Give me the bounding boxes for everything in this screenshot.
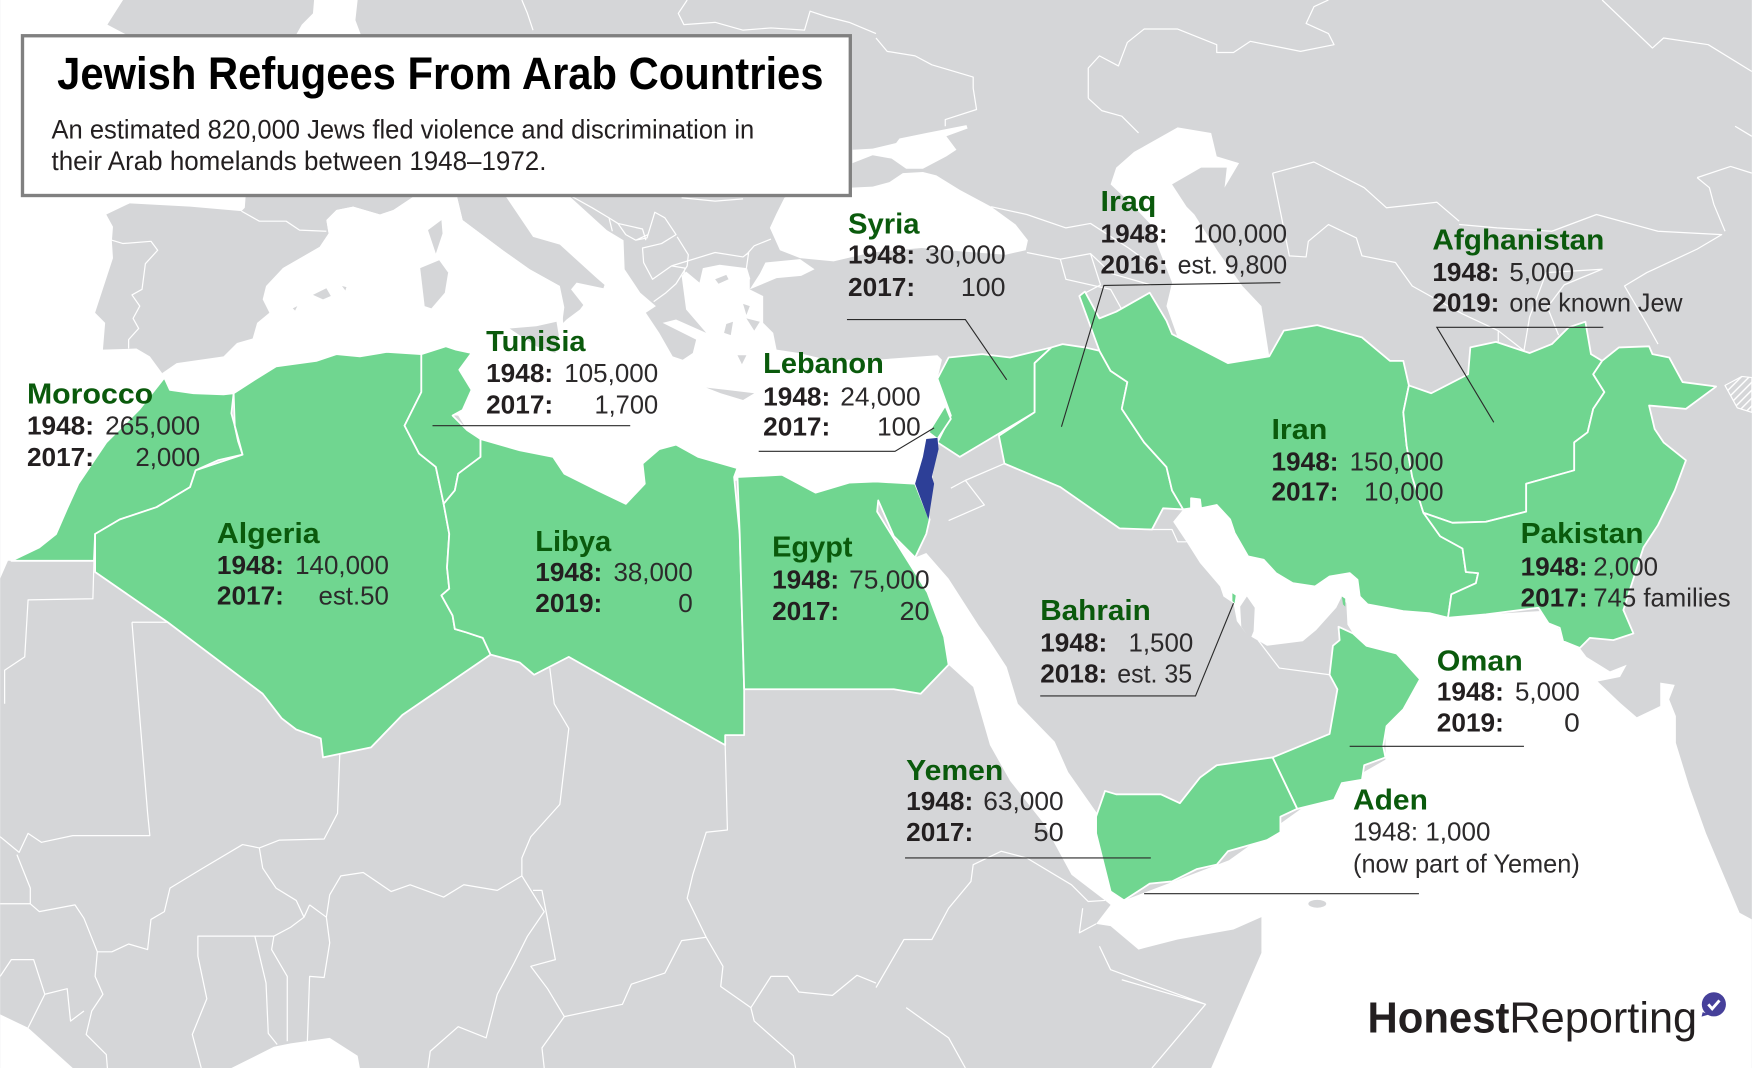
label: Lebanon: 1948: [763,382,830,412]
sea: Persian Gulf [1173,498,1368,646]
label: Afghanistan: Afghanistan [1432,225,1604,257]
label: Afghanistan: 5,000 [1509,257,1574,287]
label: Iran: 150,000 [1350,446,1444,476]
label: Morocco: 2017: [27,442,94,472]
label: Bahrain: Bahrain [1040,595,1151,627]
label: Lebanon: 24,000 [840,382,921,412]
label: Tunisia: 105,000 [564,358,658,388]
island: Crete [706,388,754,400]
label: Iran: 10,000 [1364,476,1444,506]
label: Algeria: Algeria [217,518,321,550]
sea: Caspian [1111,127,1269,363]
label: Pakistan [1521,518,1731,613]
title panel [22,36,850,196]
label: Syria: Syria [848,208,921,240]
label: Bahrain [1040,595,1193,689]
logo: HonestReporting: Honest [1368,994,1509,1042]
label: Algeria: 2017: [217,580,284,610]
logo: HonestReporting: Reporting [1509,994,1697,1042]
label: Tunisia [486,326,658,419]
country: Afghanistan [1403,322,1604,523]
island: Balearics [293,286,346,311]
label: Lebanon: 2017: [763,412,830,442]
sea: Red Sea and Indian Ocean [878,500,1752,1068]
label: Libya: Libya [535,526,612,558]
label: Pakistan: 1948: [1521,551,1588,581]
label: Egypt: 1948: [772,565,839,595]
sea: Mediterranean [162,192,951,508]
island: Corsica [428,220,443,254]
label: Pakistan: 2,000 [1593,551,1658,581]
logo: HonestReporting [1368,992,1726,1042]
country: Lebanon [929,406,951,439]
label: Egypt: Egypt [772,531,853,563]
country: Israel [915,438,939,519]
label: Bahrain: 2018: [1040,659,1107,689]
label: Iran [1271,414,1444,506]
country: Iran [1079,292,1478,618]
label: Tunisia: Tunisia [486,326,587,358]
sea: western Mediterranean basin [268,192,564,369]
sea: Gulf of Guinea [0,1014,360,1068]
label: Libya: 38,000 [613,557,693,587]
label: Afghanistan [1432,225,1684,318]
label: Iran: Iran [1271,414,1327,446]
label: Libya: 2019: [535,588,602,618]
label: Iran: 2017: [1271,476,1339,506]
heading: Jewish Refugees From Arab Countries [57,48,823,99]
island: Socotra [1308,900,1326,908]
country: Bahrain [1232,593,1236,603]
label: Iran: 1948: [1271,446,1339,476]
label: Tunisia: 1,700 [594,389,658,419]
country: Oman Musandam exclave [1342,597,1345,607]
label: Aden [1353,784,1580,878]
label: Syria: 30,000 [925,240,1006,270]
intro text: An estimated 820,000 Jews fled violence and discrimination in [52,115,754,145]
country: Algeria [95,352,491,757]
label: Algeria: est.50 [319,580,389,610]
label: Egypt [772,531,930,626]
label: Yemen: 50 [1034,817,1064,847]
label: Afghanistan: 1948: [1432,257,1499,287]
label: Egypt: 75,000 [849,565,930,595]
label: Yemen: 1948: [906,786,973,816]
label: Morocco: 1948: [27,411,94,441]
country: Morocco [11,378,243,561]
label: Morocco: 2,000 [135,442,200,472]
label: Morocco [27,378,200,472]
leader lines [432,283,1603,894]
label: Iraq: est. 9,800 [1178,250,1287,280]
label: Yemen: 2017: [906,817,973,847]
country: Libya [441,439,744,745]
label: Yemen: 63,000 [983,786,1064,816]
country: Pakistan [1423,346,1716,648]
label: Iraq: 1948: [1101,218,1168,248]
country: Tunisia [405,346,481,504]
label: Algeria [217,518,389,610]
island: Sicily [510,322,559,353]
sea: Azov [853,125,968,169]
label: Bahrain: 1,500 [1128,627,1193,657]
label: Afghanistan: one known Jew [1509,288,1684,318]
label: Tunisia: 2017: [486,389,553,419]
label: Libya: 1948: [535,557,602,587]
country: Egypt [737,475,949,694]
label: Bahrain: est. 35 [1117,659,1192,689]
label: Aden: 1948: 1,000 [1353,817,1490,847]
label: Lebanon: Lebanon [763,348,884,380]
label: Bahrain: 1948: [1040,627,1107,657]
label: Tunisia: 1948: [486,358,553,388]
country: Iraq [999,344,1183,530]
label: Lebanon: 100 [877,412,921,442]
intro text [52,115,754,176]
label: Oman: 2019: [1437,708,1504,738]
label: Iraq: 2016: [1101,250,1168,280]
label: Syria: 100 [961,272,1006,302]
island: Sardinia [420,260,448,308]
label: Syria [848,208,1006,302]
label: Algeria: 1948: [217,550,284,580]
sea: Black Sea [770,172,1028,261]
label: Morocco: Morocco [27,378,153,410]
label: Oman: 1948: [1437,676,1504,706]
label: Libya [535,526,693,618]
country: Kashmir disputed area [1725,376,1752,412]
label: Algeria: 140,000 [295,550,389,580]
label: Oman: 0 [1564,708,1580,738]
icon: verified badge [1702,992,1726,1017]
label: Pakistan: Pakistan [1521,518,1643,550]
label: Iraq: Iraq [1101,186,1156,218]
label: Libya: 0 [678,588,693,618]
label: Pakistan: 2017: [1521,583,1588,613]
country: Syria [937,347,1051,457]
label: Pakistan: 745 families [1593,583,1731,613]
label: Morocco: 265,000 [105,411,200,441]
label: Iraq: 100,000 [1193,218,1287,248]
sea: Atlantic [0,0,369,579]
label: Syria: 1948: [848,240,915,270]
label: Iraq [1101,186,1287,280]
sea: Marmara [750,259,815,289]
intro text: their Arab homelands between 1948–1972. [52,146,546,176]
label: Egypt: 2017: [772,596,839,626]
label: Aden: (now part of Yemen) [1353,848,1580,878]
label: Egypt: 20 [899,596,930,626]
label: Aden: Aden [1353,784,1428,816]
country: Oman [1273,627,1420,809]
label: Oman: Oman [1437,645,1523,677]
country: Yemen [1096,757,1297,900]
label: Oman [1437,645,1580,738]
label: Lebanon [763,348,921,442]
islands [293,220,1326,908]
label: Yemen [906,755,1064,847]
label: Syria: 2017: [848,272,915,302]
countries: highlighted region [11,292,1716,900]
label: Oman: 5,000 [1515,676,1580,706]
island: Aegean islands [715,275,760,364]
label: Afghanistan: 2019: [1432,288,1499,318]
label: Yemen: Yemen [906,755,1003,787]
